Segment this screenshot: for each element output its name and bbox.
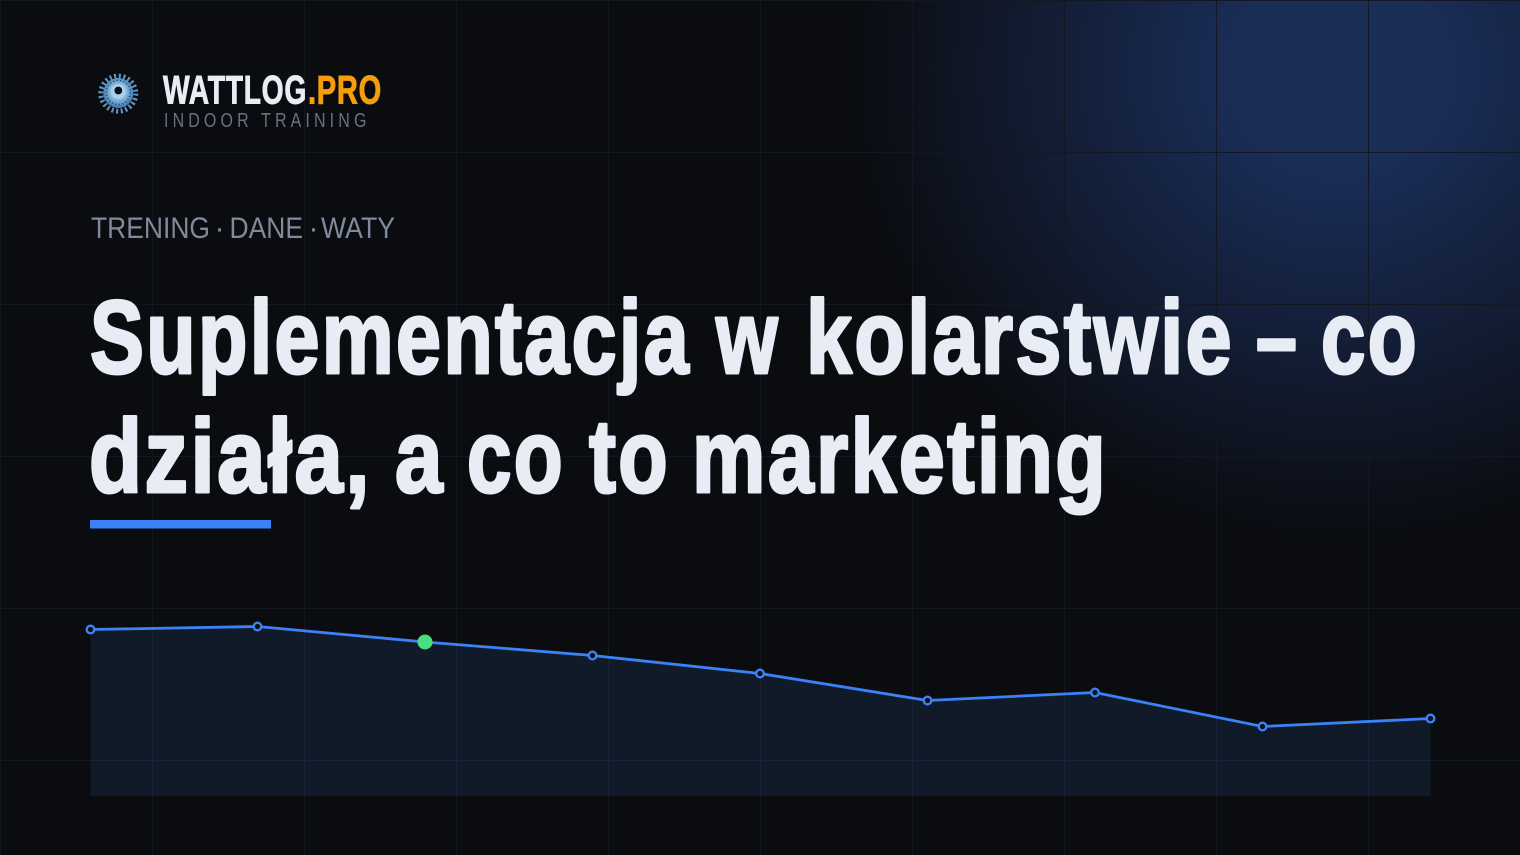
brand tagline: INDOOR TRAINING: [164, 109, 366, 131]
title: a: [395, 399, 445, 515]
highlighted green data point: [418, 634, 432, 650]
brand name: WATTLOG: [163, 68, 307, 112]
eyebrow: ·: [214, 212, 224, 245]
title: co: [467, 399, 565, 515]
title: w: [715, 280, 780, 396]
title: działa,: [89, 399, 372, 515]
title: co: [1321, 280, 1419, 396]
title: marketing: [692, 399, 1108, 515]
title: kolarstwie: [806, 280, 1234, 396]
title: [89, 280, 1419, 515]
icon: bicycle cassette logo: [101, 76, 136, 111]
title: Suplementacja: [90, 280, 691, 396]
title: –: [1256, 280, 1299, 396]
chart line: [90, 626, 1430, 726]
chart data points: [87, 623, 1434, 730]
title underline accent: [90, 520, 271, 528]
eyebrow: TRENING: [91, 212, 210, 245]
eyebrow: [91, 212, 395, 245]
eyebrow: WATY: [321, 212, 395, 245]
line chart: [87, 623, 1434, 796]
eyebrow: DANE: [230, 212, 303, 245]
title: to: [589, 399, 670, 515]
chart area fill: [90, 626, 1430, 796]
eyebrow: ·: [308, 212, 318, 245]
brand name: .PRO: [308, 68, 382, 112]
